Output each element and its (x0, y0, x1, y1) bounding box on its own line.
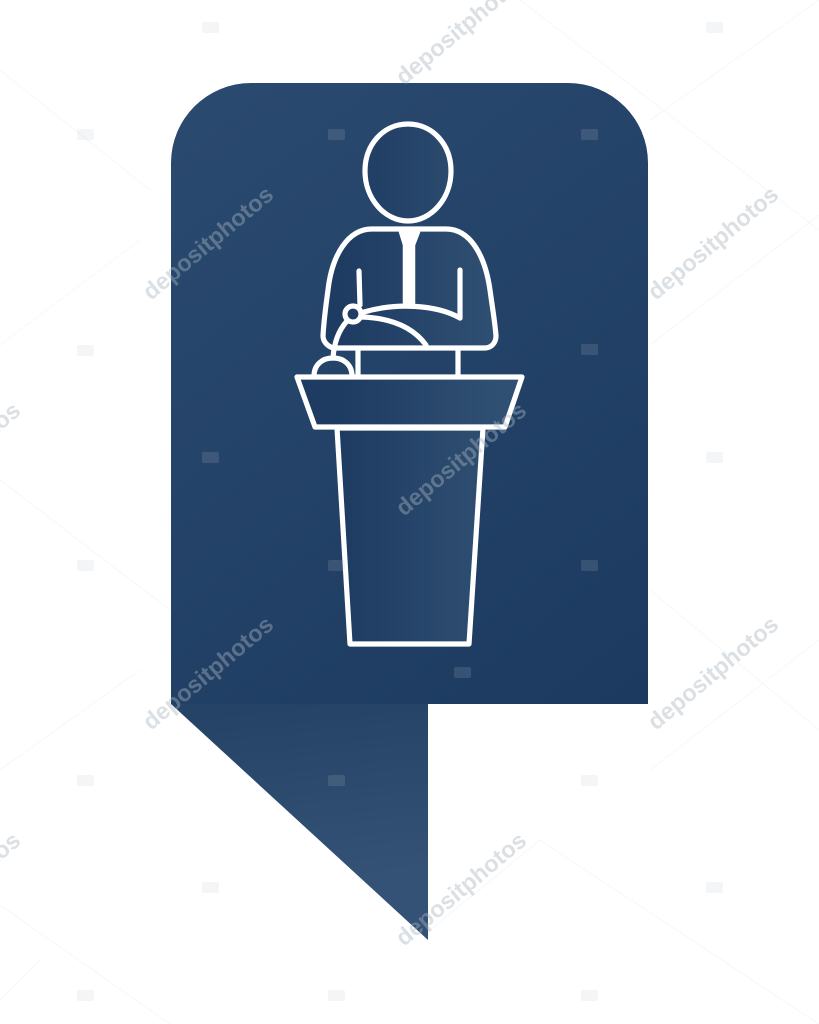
speech bubble panel (171, 83, 648, 704)
microphone (314, 306, 426, 376)
head (365, 124, 451, 221)
icon: speaker at podium (297, 124, 522, 644)
speech bubble tail (171, 704, 428, 940)
watermark: depositphotos text: depositphotos (642, 181, 783, 305)
watermark: depositphotos text: depositphotos (390, 397, 531, 521)
watermark: camera marks (77, 22, 723, 1001)
necktie (400, 232, 419, 306)
watermark: depositphotos text: depositphotos (642, 611, 783, 735)
watermark: depositphotos text: depositphotos (137, 611, 278, 735)
watermark: depositphotos text: depositphotos (137, 181, 278, 305)
torso and arms (323, 229, 496, 376)
podium top (297, 377, 522, 427)
watermark: depositphotos text: depositphotos (390, 827, 531, 951)
podium base (337, 428, 483, 644)
